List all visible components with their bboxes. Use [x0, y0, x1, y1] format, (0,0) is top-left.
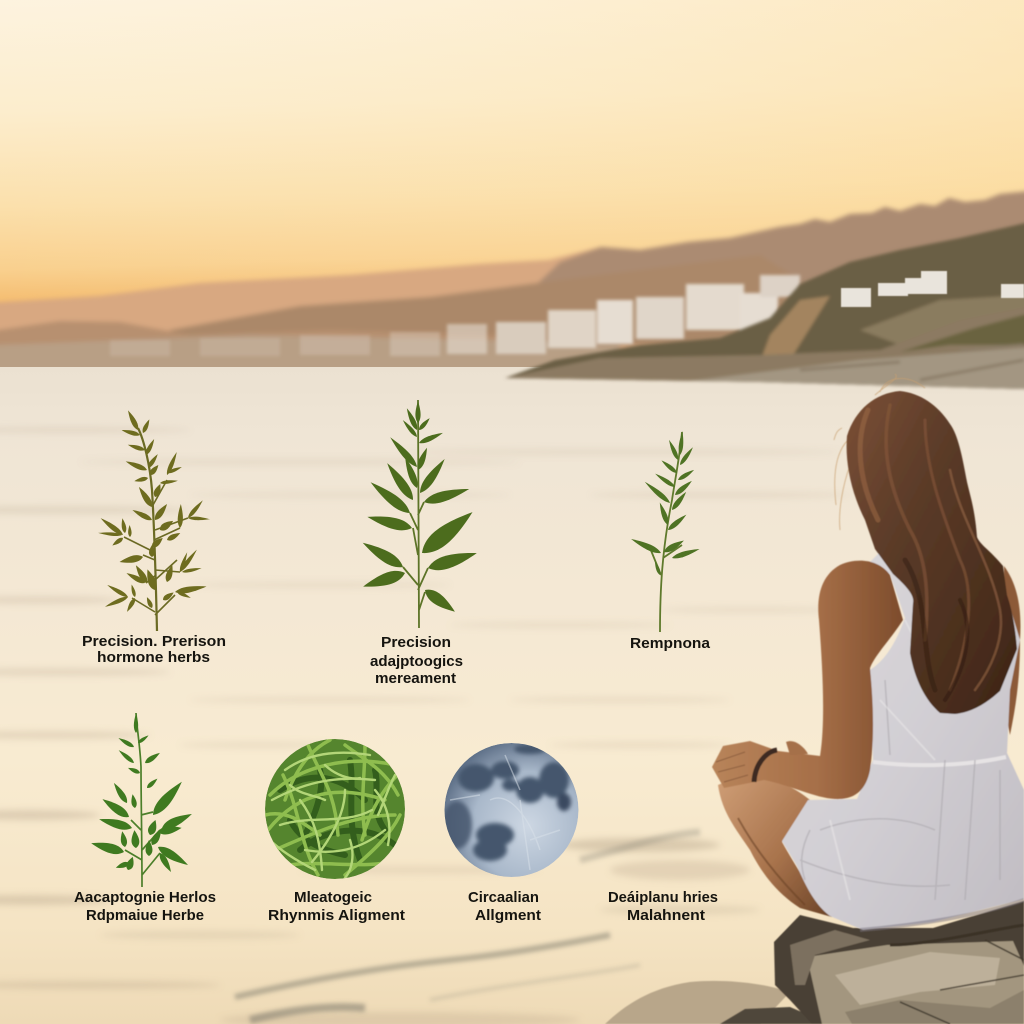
- far arm: [1003, 566, 1020, 735]
- icon: full moon: [442, 743, 578, 877]
- sea: [0, 367, 1024, 1024]
- hillside houses: [841, 271, 1024, 307]
- label: precision adaptogenics: mereament: [375, 670, 456, 687]
- plant 3: rempnona: [630, 431, 700, 632]
- icon: woven green herb sphere: [265, 739, 405, 879]
- legs: [718, 777, 832, 917]
- dress: [782, 549, 1024, 930]
- hair: [847, 391, 1017, 714]
- hair highlights: [860, 405, 1001, 700]
- bracelet: [754, 750, 777, 782]
- rocks: [720, 901, 1024, 1024]
- hotels and town: [110, 275, 800, 356]
- label: precision adaptogenics: Precision: [381, 634, 451, 651]
- label: deiplanu hries malahnent: Malahnent: [627, 907, 705, 924]
- label: metabolic rhythms alignment: Mleatogeic: [294, 889, 372, 906]
- hands: [716, 741, 808, 782]
- label: precision hormone herbs: hormone herbs: [97, 649, 210, 666]
- label: precision adaptogenics: [370, 634, 463, 687]
- hair wisps: [834, 374, 925, 530]
- plant 4: adaptogenic herbs: [90, 713, 194, 887]
- label: circadian alignment: Allgment: [475, 907, 541, 924]
- label: precision hormone herbs: [82, 633, 226, 666]
- water ripples: [0, 427, 850, 1024]
- label: metabolic rhythms alignment: [268, 889, 405, 924]
- label: adaptogenic herbs: Aacaptognie Herlos: [74, 889, 216, 906]
- label: adaptogenic herbs: Rdpmaiue Herbe: [86, 907, 204, 924]
- label: adaptogenic herbs: [74, 889, 216, 924]
- headland: [505, 215, 1024, 390]
- label: precision adaptogenics: adajptoogics: [370, 653, 463, 670]
- near arm and shoulder: [712, 561, 903, 799]
- sky background: [0, 0, 1024, 372]
- label: deiplanu hries malahnent: [608, 889, 718, 924]
- plant 2: precision adaptogenics: [360, 400, 479, 628]
- sand mound at shoreline: [605, 981, 790, 1024]
- dress folds and waistband: [800, 620, 1024, 930]
- plant 1: precision hormone herbs: [98, 409, 210, 631]
- distant mountains: [0, 188, 1024, 375]
- label: circadian alignment: [468, 889, 541, 924]
- label: deiplanu hries malahnent: Deáiplanu hries: [608, 889, 718, 906]
- label: precision hormone herbs: Precision. Prerison: [82, 633, 226, 650]
- label: circadian alignment: Circaalian: [468, 889, 539, 906]
- label: metabolic rhythms alignment: Rhynmis Aligment: [268, 907, 405, 924]
- seated woman in white dress: [712, 374, 1024, 930]
- dark foreground waves: [235, 832, 700, 1020]
- label: rempnona: Rempnona: [630, 635, 711, 652]
